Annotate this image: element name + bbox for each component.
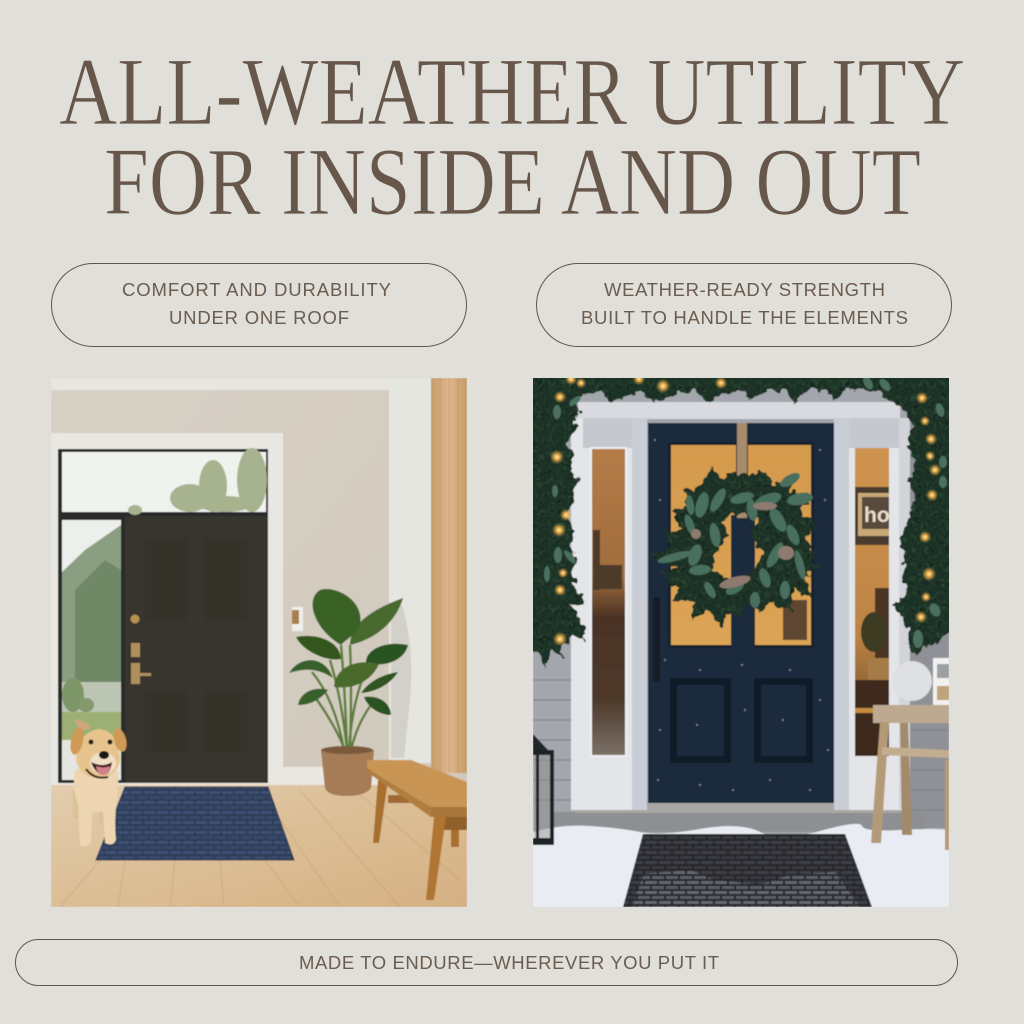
photo: indoor entryway scene	[51, 378, 467, 907]
dog	[68, 719, 129, 846]
side table	[871, 705, 949, 850]
sidelight right: ho	[864, 504, 890, 527]
wreath	[650, 466, 818, 625]
sidelight left	[591, 448, 626, 756]
callout: outdoor strength: BUILT TO HANDLE THE ELEMENTS	[581, 307, 908, 328]
door frame	[51, 433, 283, 785]
bottom banner: MADE TO ENDURE—WHEREVER YOU PUT IT	[299, 952, 719, 973]
callout: indoor comfort: COMFORT AND DURABILITY	[122, 279, 391, 300]
door mat	[96, 787, 294, 860]
garland: right	[883, 386, 949, 656]
snow	[533, 824, 949, 907]
windows	[58, 448, 268, 783]
wall shadow	[391, 600, 411, 758]
floor	[51, 785, 467, 907]
front door	[648, 423, 834, 803]
planter pot	[321, 746, 374, 796]
small lantern frame	[933, 658, 949, 706]
front door	[125, 516, 268, 783]
garland: top	[578, 378, 893, 406]
photo: outdoor winter porch scene	[525, 370, 957, 907]
callout: indoor comfort	[52, 264, 466, 346]
lantern	[533, 734, 554, 845]
plant	[289, 589, 408, 750]
callout: outdoor strength	[536, 264, 952, 346]
bench	[367, 760, 467, 900]
door mat	[623, 834, 872, 907]
callout: indoor comfort: UNDER ONE ROOF	[169, 307, 349, 328]
callout: outdoor strength: WEATHER-READY STRENGTH	[604, 279, 885, 300]
bottom banner	[16, 940, 958, 986]
light switch	[292, 607, 303, 631]
door surround	[571, 402, 910, 810]
wood panel	[431, 378, 467, 773]
garland: left	[533, 392, 587, 668]
title	[59, 38, 965, 235]
string lights	[550, 373, 941, 646]
snowball ornament	[900, 660, 932, 702]
sidelight right	[855, 448, 890, 756]
garland leaves	[544, 375, 947, 648]
side wall	[389, 378, 432, 763]
porch step	[553, 803, 925, 832]
